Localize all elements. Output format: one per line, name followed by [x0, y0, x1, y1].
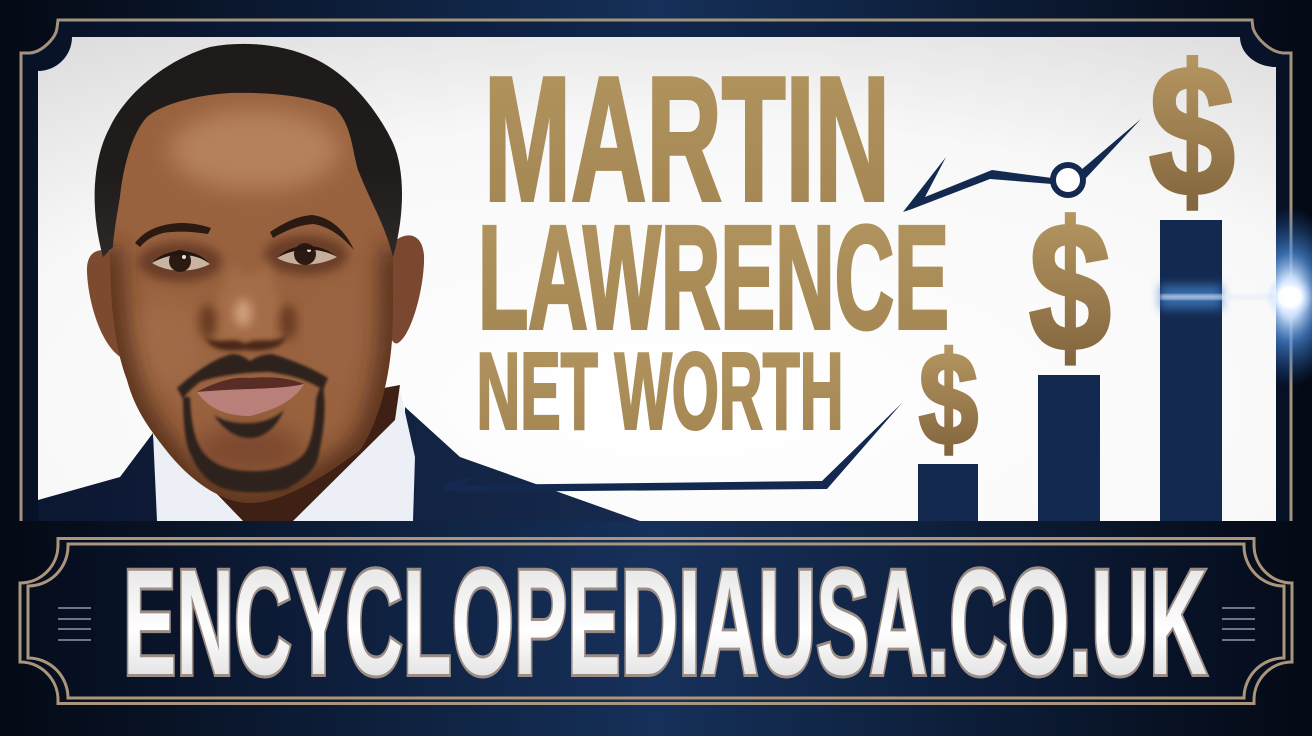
right ear — [388, 235, 424, 343]
flare core — [1266, 275, 1312, 319]
chin patch — [214, 410, 284, 438]
nose — [199, 258, 297, 351]
left eye — [152, 250, 210, 272]
decorative lines: right — [1222, 608, 1255, 640]
panel: website plaque — [20, 538, 1292, 706]
lens flare — [1160, 207, 1312, 387]
left brow — [135, 223, 211, 247]
nose highlight — [234, 299, 252, 327]
nose right side shade — [279, 304, 297, 340]
bar: large — [1160, 220, 1222, 521]
bar: medium — [1038, 375, 1100, 521]
face edge shade — [110, 247, 393, 503]
bottom band — [0, 521, 1312, 736]
neck — [217, 385, 400, 521]
nose left side shade — [199, 304, 217, 340]
bar: small — [918, 464, 978, 521]
lower lip — [197, 384, 304, 416]
arrow: lower trend line — [442, 403, 902, 492]
suit — [38, 407, 640, 521]
panel: main white panel — [38, 37, 1276, 521]
right cheek — [304, 290, 376, 380]
portrait: man in suit — [38, 44, 640, 521]
decorative lines: left — [58, 608, 91, 640]
right eye socket — [264, 235, 348, 275]
title: Martin Lawrence Net Worth — [476, 40, 949, 452]
left cheek — [146, 322, 184, 368]
forehead highlight — [170, 110, 340, 190]
right brow — [270, 215, 354, 250]
title: Martin Lawrence Net Worth: NET WORTH — [476, 330, 844, 452]
hair — [95, 44, 402, 257]
icon: small dollar: $ — [919, 325, 978, 472]
moustache — [177, 354, 328, 399]
icon: large dollar: $ — [1149, 28, 1235, 235]
goatee — [183, 387, 325, 493]
chart: rising bars with dollar signs — [918, 28, 1235, 521]
upper lip — [197, 377, 304, 392]
nose shadow — [206, 336, 286, 351]
arrow: upper trend line — [903, 119, 1141, 212]
white streak — [1160, 295, 1290, 299]
title: Martin Lawrence Net Worth: MARTIN — [484, 40, 890, 238]
right eye — [277, 243, 337, 265]
title: Martin Lawrence Net Worth: LAWRENCE — [478, 196, 949, 360]
chin shade — [195, 425, 305, 475]
top frame — [21, 20, 1291, 540]
streak on bar — [1160, 285, 1222, 309]
left ear — [87, 250, 122, 358]
blue glow on frame — [1276, 210, 1312, 384]
icon: medium dollar: $ — [1029, 184, 1111, 389]
face — [100, 80, 400, 510]
left eye socket — [138, 242, 222, 282]
shirt collar — [153, 390, 415, 521]
